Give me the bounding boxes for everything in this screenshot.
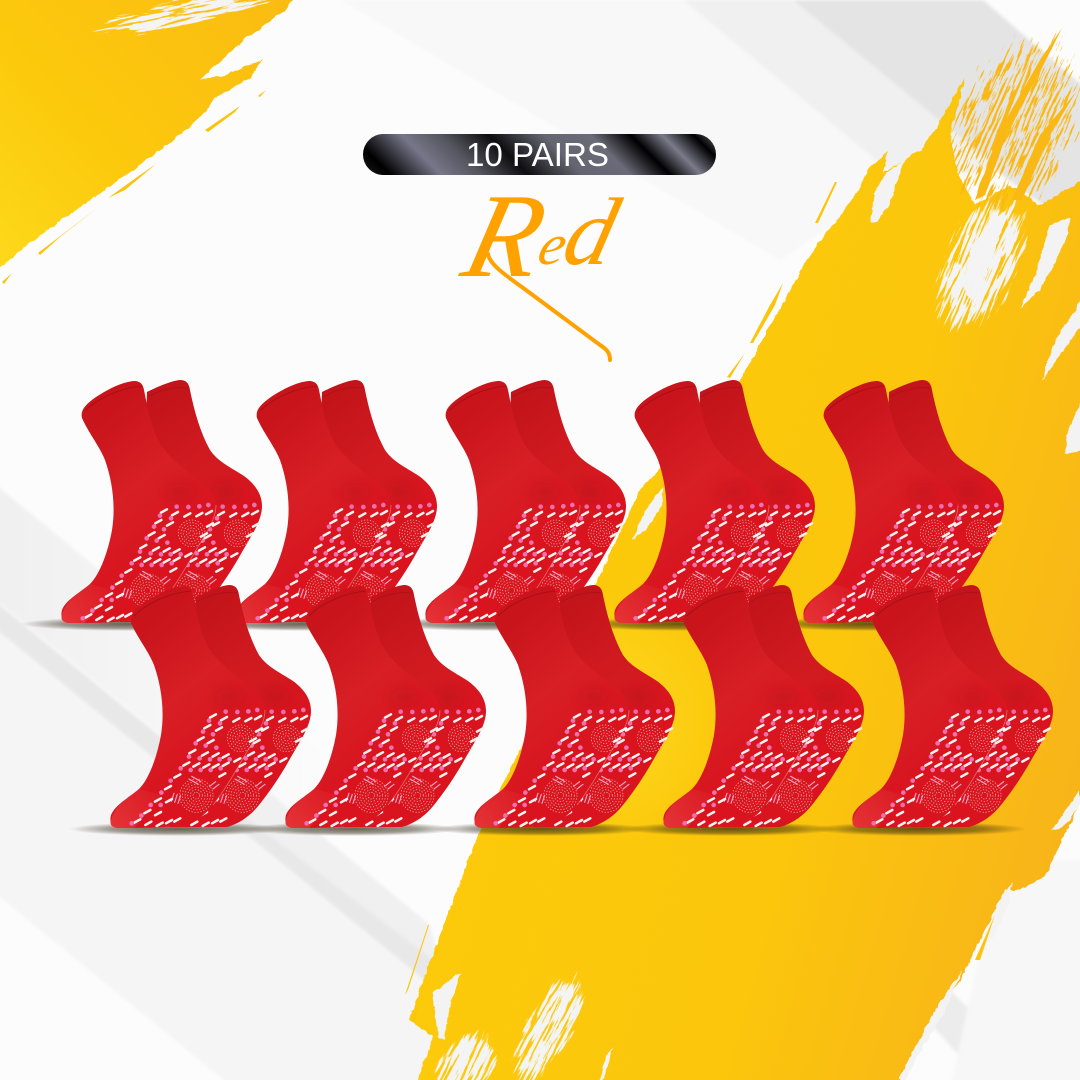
pill text: 10 PAIRS <box>466 136 609 173</box>
texture: top-left dry brush <box>84 0 296 49</box>
sock pair 2 back row <box>236 380 437 623</box>
sock pair 10 front row <box>852 585 1053 828</box>
brush streaks top-right <box>975 28 1076 200</box>
Red tail flourish <box>488 254 610 360</box>
shadows: back row <box>20 617 978 631</box>
sock pair 1 back row <box>61 380 262 623</box>
script colour name: Red <box>451 170 631 360</box>
texture: top-right dry brush white over yellow <box>910 170 1054 354</box>
brush flecks around main band <box>405 182 995 1022</box>
sock pair 3 back row <box>425 380 626 623</box>
sock pair 9 front row <box>663 585 864 828</box>
brush stroke: main yellow band <box>409 77 1080 1080</box>
script colour name: Red: e <box>532 213 574 277</box>
sock pair 7 front row <box>285 585 486 828</box>
texture: top-right dry brush yellow over grey <box>897 0 1080 262</box>
brush stroke: top-left yellow <box>0 0 300 284</box>
texture: bottom dry brush left <box>417 1014 513 1080</box>
sock pair 6 front row <box>110 585 311 828</box>
pill label: 10 PAIRS <box>363 134 716 175</box>
brush gouges in main band <box>432 160 1080 1080</box>
script colour name: Red: d <box>554 179 629 286</box>
brush flecks along top-left edge <box>2 90 266 284</box>
sock pair 4 back row <box>614 380 815 623</box>
script colour name: Red: R <box>451 170 558 303</box>
texture: bottom dry brush centre <box>491 954 605 1080</box>
sock pair 8 front row <box>474 585 675 828</box>
shadows: front row <box>69 822 1027 836</box>
sock pair 5 back row <box>803 380 1004 623</box>
